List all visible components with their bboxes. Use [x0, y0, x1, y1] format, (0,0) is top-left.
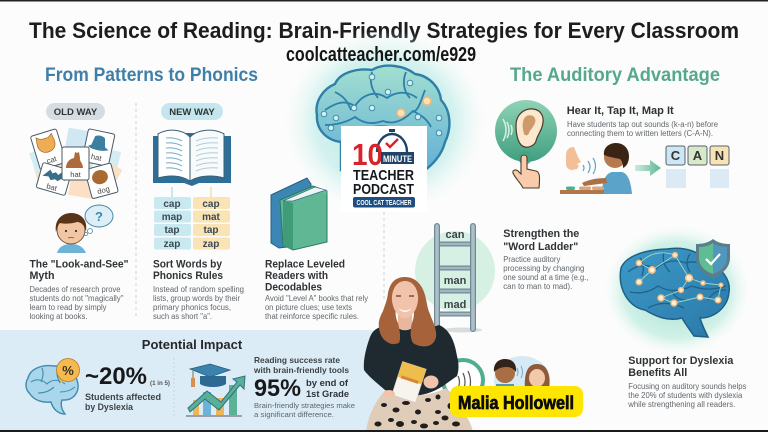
word sort chart: tap [164, 225, 180, 236]
text: look-and-see myth [30, 258, 128, 321]
text: look-and-see myth: looking at books. [30, 312, 88, 321]
podcast logo: 10 [352, 137, 383, 172]
heading: from patterns to phonics: From Patterns to Phonics [45, 65, 258, 86]
heading: potential impact: Potential Impact [142, 337, 243, 352]
text: support for dyslexia: while strengthening all readers. [627, 400, 735, 409]
icon: student tapping sounds [560, 143, 632, 194]
icon: brain with percent: % [62, 363, 74, 378]
new way badge [161, 103, 223, 120]
card: bat: bat [45, 181, 59, 193]
text: replace leveled readers: Replace Leveled [265, 258, 345, 270]
card: dog: dog [96, 184, 111, 196]
stat: 95 percent: a significant difference. [254, 410, 334, 419]
text: strengthen the word ladder: Practice auditory [503, 255, 560, 264]
stat: 95 percent: with brain-friendly tools [253, 365, 349, 375]
old way badge: OLD WAY [54, 107, 98, 118]
new way badge: NEW WAY [169, 107, 215, 118]
icon: graduation cap and growth chart [186, 364, 245, 416]
word sort chart: mat [202, 212, 221, 223]
text: replace leveled readers: on picture clues; use texts [265, 303, 352, 312]
face [392, 281, 418, 318]
text: sort words: primary phonics focus, [153, 303, 231, 312]
word sort chart: cap [163, 199, 181, 210]
stat: 95 percent: by end of [306, 378, 349, 389]
text: hear it tap it map it: connecting them to written letters (C-A-N). [567, 129, 713, 138]
podcast logo: PODCAST [353, 181, 414, 198]
text: support for dyslexia [627, 355, 746, 409]
word sort chart: map [162, 212, 182, 223]
stat: 20 percent: by Dyslexia [85, 402, 134, 412]
thought bubble: ? [95, 209, 103, 224]
hands [424, 376, 438, 388]
text: replace leveled readers: that reinforce specific rules. [265, 312, 359, 321]
text: look-and-see myth: learn to read by simply [30, 303, 106, 312]
letter boxes C A N: N [715, 148, 724, 163]
photo: presenter [364, 277, 473, 432]
bottom border [0, 430, 768, 432]
icon: central brain [285, 30, 485, 214]
text: look-and-see myth: The "Look-and-See" [30, 258, 128, 270]
heading: the auditory advantage: The Auditory Advantage [510, 65, 720, 86]
podcast logo: TEACHER [353, 167, 414, 184]
icon: confused boy [56, 205, 113, 253]
text: hear it tap it map it [567, 105, 719, 138]
column divider [136, 103, 384, 318]
stat: 95 percent: Brain-friendly strategies make [254, 401, 355, 410]
word sort chart: cap [202, 199, 220, 210]
text: replace leveled readers: Avoid "Level A" books that rely [265, 294, 368, 303]
text: strengthen the word ladder: Strengthen the [503, 228, 579, 240]
text: replace leveled readers: Readers with [265, 270, 328, 282]
icon: ear with tap hand [495, 100, 557, 188]
hair [379, 277, 436, 346]
podcast logo: MINUTE [383, 154, 412, 165]
text: support for dyslexia: Focusing on auditory sounds helps [628, 382, 746, 391]
name label: Malia Hollowell [458, 393, 574, 413]
neck [398, 314, 412, 330]
stat: 20 percent: Students affected [85, 392, 161, 402]
text: replace leveled readers [265, 258, 368, 321]
text: look-and-see myth: Decades of research prove [30, 285, 121, 294]
text: replace leveled readers: Decodables [265, 282, 322, 294]
text: strengthen the word ladder: processing by changing [503, 264, 584, 273]
word sort chart: zap [203, 239, 219, 250]
tapping hand [513, 152, 540, 188]
letter boxes C A N: C [671, 148, 681, 163]
top border [0, 0, 768, 2]
panel: potential impact [0, 330, 420, 430]
text: strengthen the word ladder: one sound at a time (e.g., [503, 273, 588, 282]
icon: word ladder: can [446, 229, 465, 241]
text: sort words: Phonics Rules [153, 270, 223, 282]
card: centre cat: hat [70, 170, 82, 179]
icon: brain with percent [26, 358, 80, 414]
text: sort words [153, 258, 244, 321]
text: sort words: such as short "a". [153, 312, 212, 321]
word sort chart: tap [204, 225, 218, 236]
card: hat: hat [90, 152, 103, 163]
text: strengthen the word ladder: can to man to mad). [503, 282, 572, 291]
text: support for dyslexia: Support for Dyslexia [628, 355, 734, 367]
text: look-and-see myth: Myth [30, 270, 55, 282]
letter boxes C A N [666, 146, 729, 188]
text: sort words: Instead of random spelling [153, 285, 244, 294]
text: hear it tap it map it: Have students tap out sounds (k-a-n) before [567, 120, 719, 129]
skirt [366, 388, 473, 432]
icon: word ladder: man [444, 275, 467, 287]
icon: decodable books [271, 178, 327, 250]
stat: 95 percent [253, 355, 355, 419]
shield [696, 239, 730, 278]
icon: protected brain [605, 226, 749, 354]
stat: 20 percent: ~20% [85, 363, 147, 390]
word sort chart [154, 187, 230, 250]
text: hear it tap it map it: Hear It, Tap It, Map It [567, 105, 674, 117]
icon: word ladder [415, 226, 495, 332]
arrow [635, 160, 661, 176]
title: The Science of Reading: Brain-Friendly Strategies for Every Classroom [29, 18, 739, 43]
podcast logo: COOL CAT TEACHER [356, 200, 412, 207]
icon: open book [153, 130, 231, 186]
text: strengthen the word ladder: "Word Ladder" [503, 241, 578, 253]
stat: 20 percent: (1 in 5) [150, 381, 170, 387]
text: support for dyslexia: Benefits All [628, 367, 687, 379]
old way badge [46, 103, 105, 120]
top [364, 325, 458, 396]
word sort chart: zap [164, 239, 180, 250]
stopwatch [377, 129, 407, 152]
letter boxes C A N: A [693, 148, 703, 163]
stat: 95 percent: 1st Grade [306, 389, 349, 400]
stat: 95 percent: 95% [254, 375, 301, 402]
icon: flash cards [29, 128, 122, 199]
stat: 95 percent: Reading success rate [254, 355, 340, 365]
text: sort words: lists, group words by their [153, 294, 240, 303]
held book [392, 361, 426, 403]
card: cat: cat [45, 154, 59, 166]
text: sort words: Sort Words by [153, 258, 223, 270]
text: support for dyslexia: the 20% of students with dyslexia [628, 391, 743, 400]
text: look-and-see myth: students do not "magically" [30, 294, 124, 303]
name label [450, 386, 583, 417]
icon: listening ring [443, 360, 483, 400]
stat: 20 percent [85, 363, 170, 412]
icon: two children [494, 356, 550, 404]
icon: word ladder: mad [444, 299, 466, 311]
episode url: coolcatteacher.com/e929 [286, 44, 476, 66]
podcast logo [341, 126, 427, 212]
text: strengthen the word ladder [503, 228, 588, 291]
